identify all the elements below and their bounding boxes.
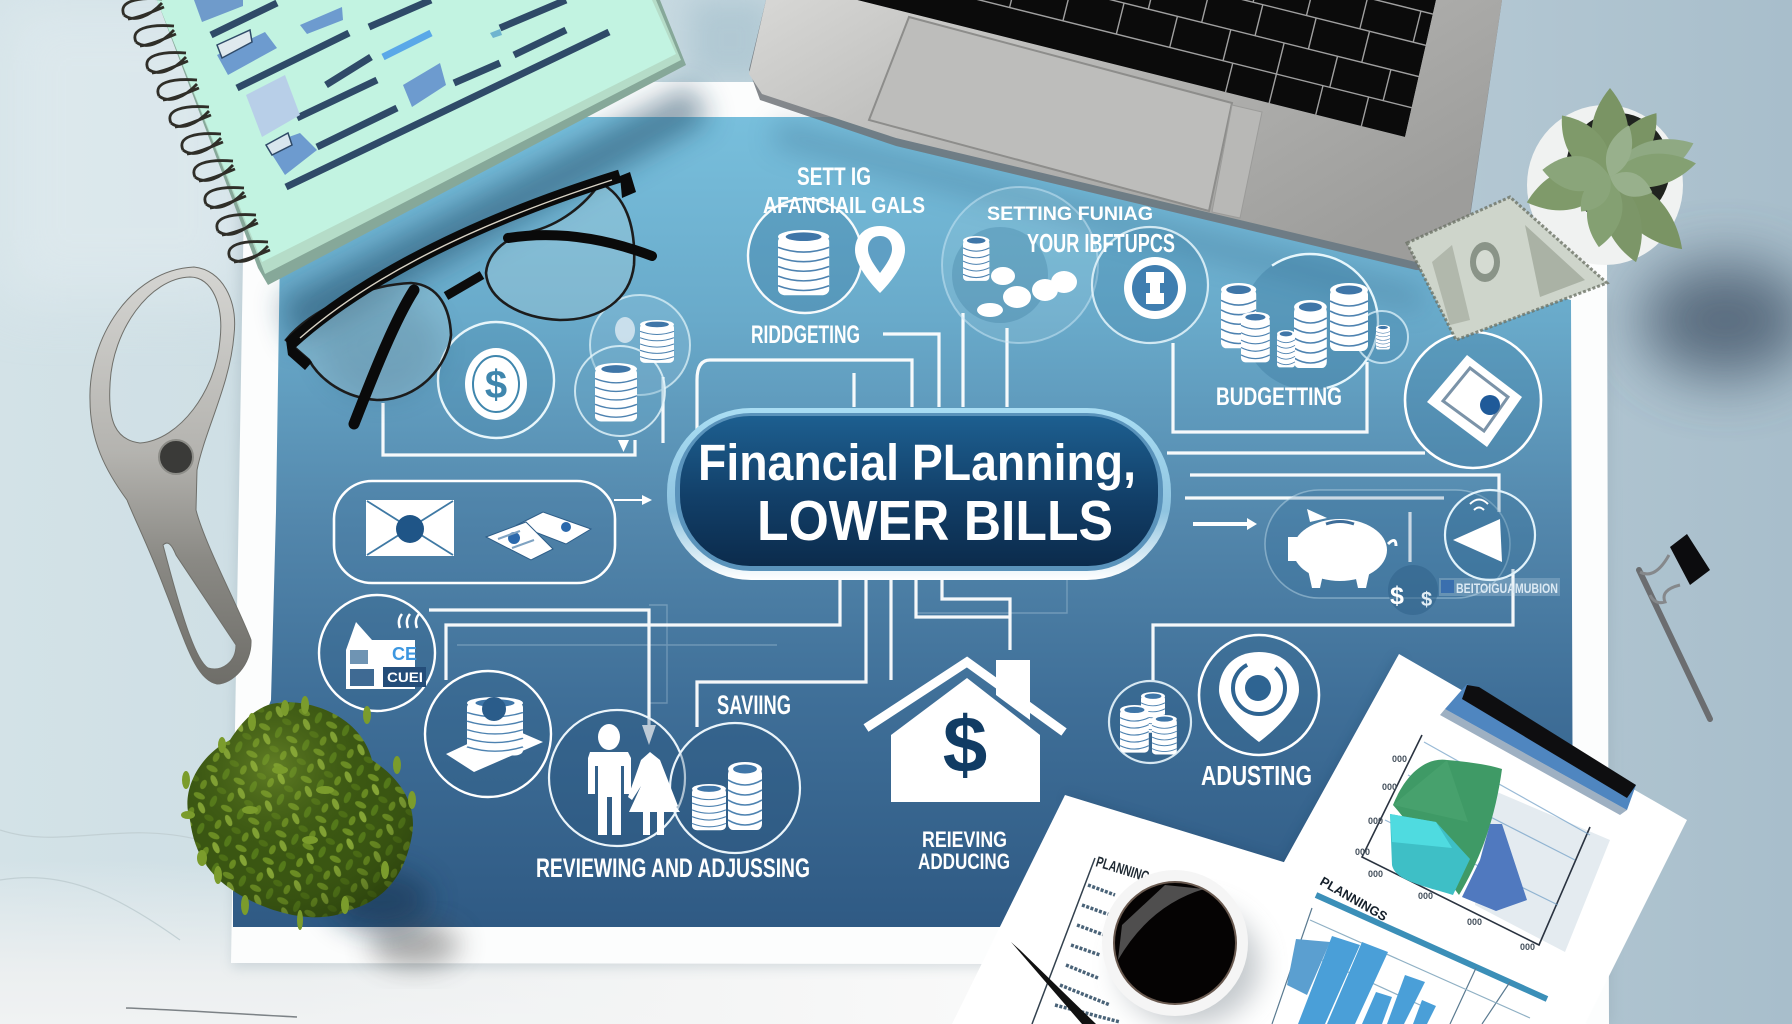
succulent in pot [1521, 88, 1700, 267]
dollar node [438, 322, 554, 438]
label: BUDGETTING [1216, 383, 1342, 411]
label: ridgeting: RIDDGETING [751, 321, 860, 349]
axis ticks: 000 [1520, 942, 1535, 952]
connector lines [383, 313, 1513, 730]
leaves [181, 696, 416, 930]
adjusting node [1109, 635, 1319, 791]
axis ticks: 000 [1392, 754, 1407, 764]
icon: house [866, 660, 1064, 802]
shadow of succulent on desk [1640, 262, 1792, 378]
coffee cup [1102, 870, 1260, 1024]
leaves [1521, 88, 1700, 267]
icon: coins [963, 236, 1077, 317]
shadow under chart sheet [1065, 654, 1410, 880]
bill node [1405, 332, 1541, 468]
coin base node [425, 671, 551, 797]
icon: coin stacks [1221, 283, 1390, 368]
blue poster panel [233, 117, 1573, 927]
bridge [446, 275, 482, 296]
arrows [614, 440, 1257, 745]
folder icons [194, 0, 502, 175]
people and savings node [536, 690, 810, 883]
icon: building: CE [392, 644, 417, 664]
right lens [486, 183, 634, 320]
text bars [211, 0, 609, 187]
icon: small coin circle [1388, 565, 1438, 615]
sheet: spreadsheet report [952, 795, 1587, 1024]
dollar node: $ [485, 363, 507, 407]
message box node [334, 481, 615, 583]
icon: house: $ [943, 700, 987, 789]
icon: cards [486, 512, 591, 560]
sheet: chart report [1240, 654, 1687, 1024]
label: REVIEWING AND ADJUSSING [536, 853, 810, 883]
axis ticks: 000 [1467, 917, 1482, 927]
icon: coin stack [778, 230, 829, 295]
icon: woman [628, 752, 680, 835]
label: SAVIING [717, 690, 791, 720]
label: ADUSTING [1201, 760, 1312, 791]
pie chart green [1393, 760, 1502, 895]
icon: small coin circle: $ [1390, 582, 1404, 610]
axis ticks: 000 [1418, 891, 1433, 901]
spiral binding [123, 0, 270, 262]
table lines [1032, 858, 1095, 1024]
shadow under notebook [280, 85, 710, 345]
bar chart table: PLANNINGS [1318, 874, 1390, 924]
label: YOUR IBFTUPCS [1027, 228, 1175, 258]
axis ticks [1355, 754, 1535, 952]
savings node with piggy bank [1265, 490, 1560, 615]
central title pill [667, 408, 1171, 580]
shadow under plant on paper [370, 923, 460, 967]
bars [1287, 936, 1436, 1024]
icon: pin [1219, 652, 1299, 742]
temple arm right [508, 235, 652, 256]
glasses [286, 172, 652, 424]
title line 1: Financial PLanning, [698, 434, 1136, 491]
shadow under laptop [770, 120, 1420, 310]
label: ADDUCING [918, 849, 1010, 874]
magnifier handle [90, 267, 251, 684]
dollar bill [1407, 197, 1607, 340]
icon: building: CUEI [387, 669, 423, 685]
blue pen [1440, 684, 1636, 815]
light accent bar [383, 33, 431, 57]
house node [866, 660, 1064, 874]
axis ticks: 000 [1368, 816, 1383, 826]
budgeting node [1216, 254, 1408, 411]
axis ticks: 000 [1355, 847, 1370, 857]
icon: location pin [855, 226, 905, 293]
axis ticks: 000 [1368, 869, 1383, 879]
brow bar [290, 176, 620, 344]
goal setting node [748, 163, 925, 313]
small label: BEITOIGUAMUBION [1456, 580, 1558, 596]
shadow under plant on panel [330, 870, 430, 930]
icon: piggy bank [1288, 509, 1396, 588]
axes [1362, 735, 1590, 945]
icon: man [588, 724, 631, 835]
label: SETT IG [797, 163, 871, 191]
label: REIEVING [922, 827, 1007, 852]
pencil [1011, 942, 1096, 1024]
plot background [1475, 789, 1610, 952]
axis ticks: 000 [1382, 782, 1397, 792]
pivot [159, 440, 193, 474]
notebook [123, 0, 686, 285]
title line 2: LOWER BILLS [757, 489, 1113, 553]
left lens [286, 283, 451, 400]
house circle node [319, 595, 435, 711]
bush plant [181, 696, 416, 930]
label: SETTING FUNIAG [987, 204, 1153, 225]
label: AFANCIAIL GALS [763, 192, 925, 218]
laptop [749, 0, 1502, 272]
icon: envelope [366, 500, 454, 556]
icon: triangle circle [1445, 490, 1535, 580]
temple arm left [354, 290, 414, 424]
faint guide lines [457, 580, 1067, 703]
icon: coins [1120, 692, 1177, 754]
trackpad [869, 17, 1232, 211]
icon: banknote [1427, 355, 1522, 447]
keyboard [857, 0, 1459, 143]
cone chart blue [1462, 824, 1527, 911]
icon: coin stacks [692, 762, 762, 830]
icon: building [346, 614, 426, 689]
white poster sheet [231, 82, 1612, 1024]
coin nodes top left [575, 295, 690, 436]
funding node [942, 187, 1208, 343]
binder clip and pen [1639, 534, 1710, 719]
bar chart table [1272, 874, 1547, 1024]
pie chart teal [1390, 814, 1470, 895]
small label [1439, 578, 1560, 596]
icon: dollar ring [1124, 257, 1186, 319]
icon: small coin circle: $ [1421, 589, 1432, 611]
header text: PLANNING [1094, 854, 1151, 886]
